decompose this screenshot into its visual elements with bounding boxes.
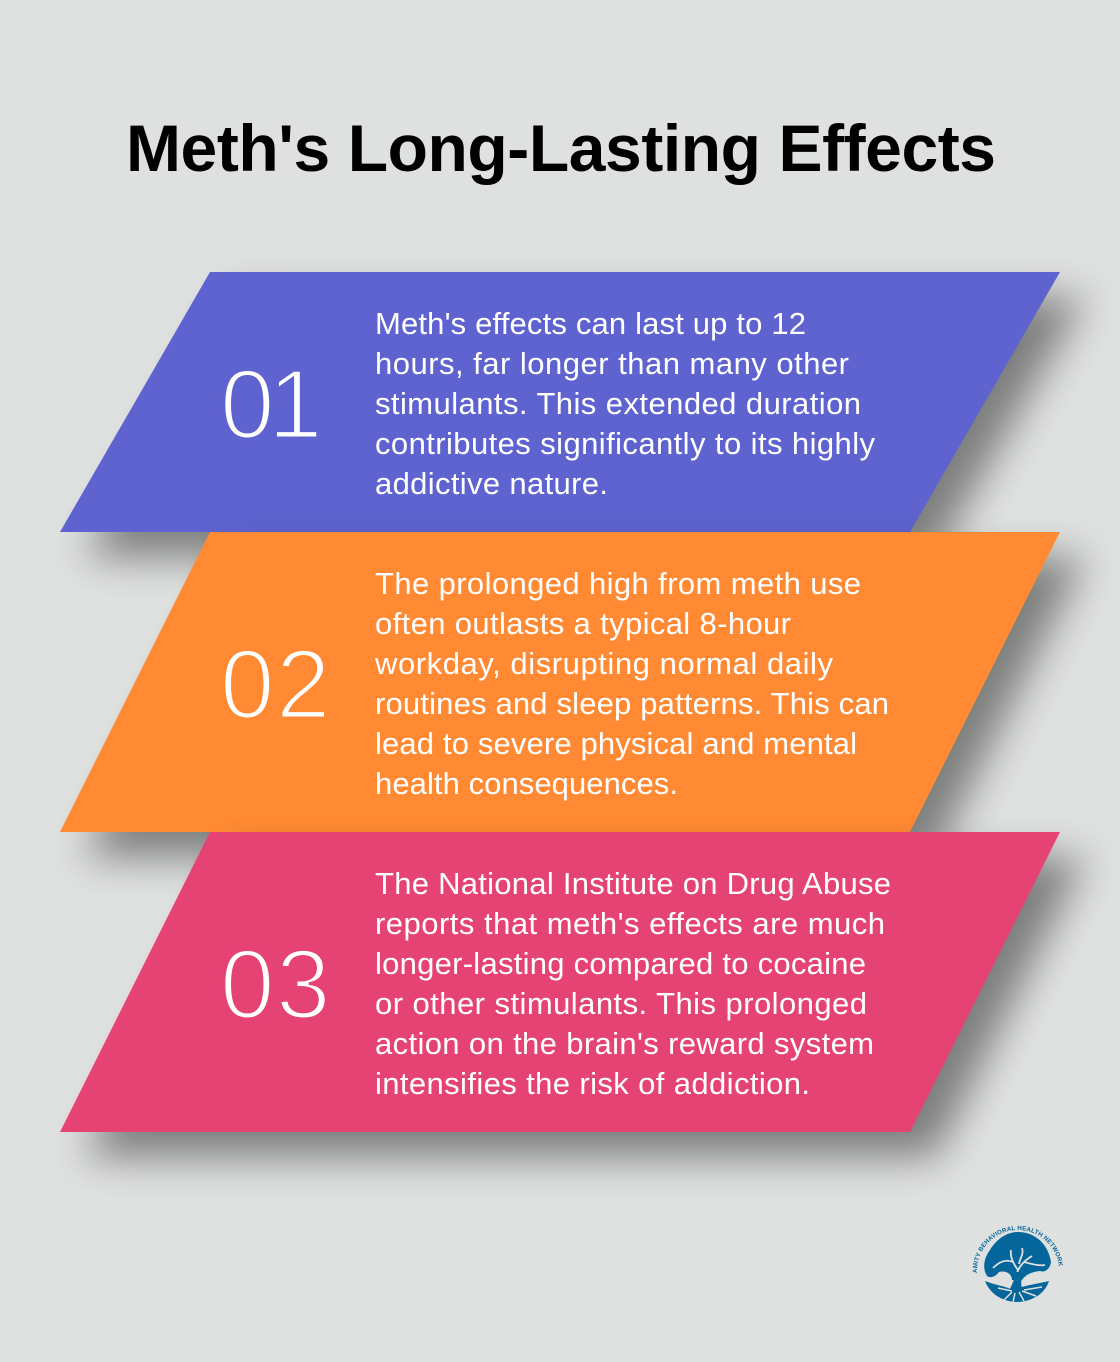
step 01 text: addictive nature. bbox=[375, 466, 608, 501]
root lines bbox=[998, 1287, 1042, 1302]
step 03 text: action on the brain's reward system bbox=[375, 1026, 874, 1061]
tree branches bbox=[993, 1248, 1045, 1280]
step 02 text: lead to severe physical and mental bbox=[375, 726, 857, 761]
step 03 text: The National Institute on Drug Abuse bbox=[375, 866, 891, 901]
step 03 number: 03 bbox=[220, 929, 331, 1039]
step 02 text bbox=[374, 566, 889, 801]
step 01 text: Meth's effects can last up to 12 bbox=[375, 306, 806, 341]
icon: Amity Behavioral Health Network logo: AMITY BEHAVIORAL HEALTH NETWORK bbox=[972, 1226, 1063, 1273]
step 03 text bbox=[375, 866, 891, 1101]
panel: step 02 bbox=[60, 532, 1085, 857]
step 01 text bbox=[375, 306, 876, 501]
step 02 text: routines and sleep patterns. This can bbox=[375, 686, 889, 721]
step 01 text: stimulants. This extended duration bbox=[375, 386, 861, 421]
title: Meth's Long-Lasting Effects bbox=[126, 111, 996, 185]
step 01 number: 01 bbox=[220, 349, 323, 459]
step 03 text: reports that meth's effects are much bbox=[375, 906, 885, 941]
panel: step 01 bbox=[60, 272, 1085, 557]
step 02 text: workday, disrupting normal daily bbox=[374, 646, 834, 681]
panel: step 03 bbox=[60, 832, 1085, 1157]
step 03 band bbox=[60, 832, 1060, 1132]
step 01 text: contributes significantly to its highly bbox=[375, 426, 876, 461]
step 02 number: 02 bbox=[220, 629, 331, 739]
step 02 text: The prolonged high from meth use bbox=[375, 566, 861, 601]
step 03 text: intensifies the risk of addiction. bbox=[375, 1066, 810, 1101]
step 01 band bbox=[60, 272, 1060, 532]
tree trunk bbox=[1008, 1272, 1026, 1293]
step 01 text: hours, far longer than many other bbox=[375, 346, 849, 381]
step 02 text: often outlasts a typical 8-hour bbox=[375, 606, 791, 641]
step 03 text: or other stimulants. This prolonged bbox=[375, 986, 867, 1021]
roots bowl bbox=[985, 1281, 1049, 1302]
step 02 band bbox=[60, 532, 1060, 832]
tree canopy bbox=[984, 1232, 1051, 1280]
step 03 text: longer-lasting compared to cocaine bbox=[375, 946, 866, 981]
icon: Amity Behavioral Health Network logo bbox=[972, 1226, 1063, 1302]
step 02 text: health consequences. bbox=[375, 766, 678, 801]
